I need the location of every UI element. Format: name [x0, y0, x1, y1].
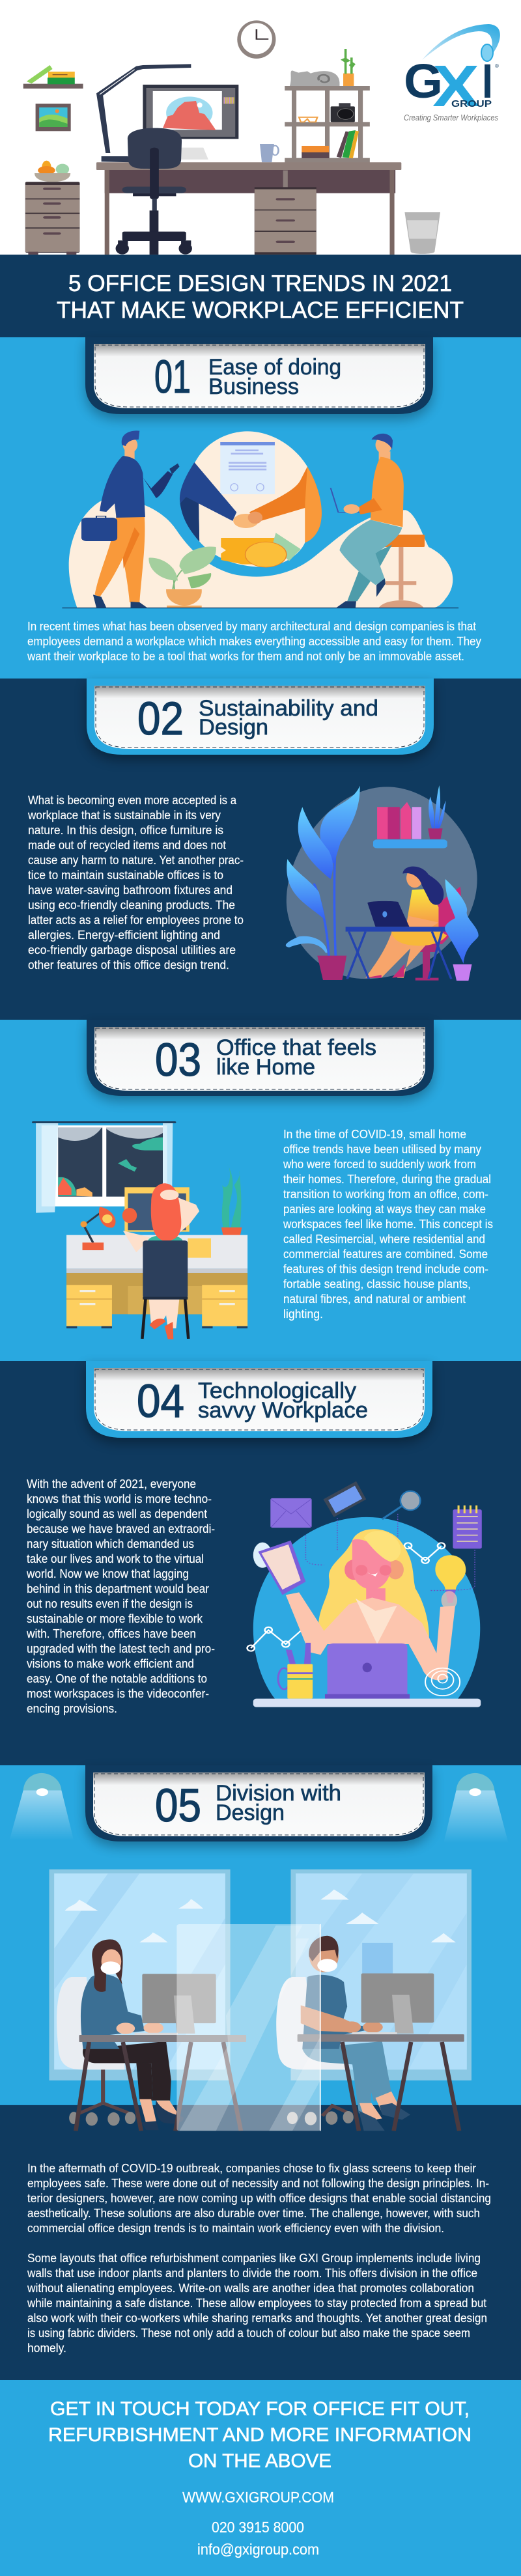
logo: Creating Smarter Workplaces: [404, 113, 498, 122]
body text 05 paragraph 2: walls that use indoor plants and planters to divide the room. This offers division in the office: [27, 2267, 477, 2280]
woman from behind: [122, 1183, 199, 1339]
filing cabinet with fruit bowl: [25, 161, 79, 255]
logo: G: [404, 54, 443, 108]
body text 03: fortable seating, classic house plants,: [283, 1278, 471, 1291]
body text 02: latter acts as a relief for employees prone to: [28, 914, 244, 927]
tab heading 02: 02: [137, 693, 184, 745]
body text 02: [27, 794, 244, 972]
desk: [96, 162, 401, 255]
panel: section 01: [27, 337, 481, 663]
woman with mask: [57, 1939, 184, 2130]
window with curtains: [32, 1121, 176, 1213]
body text 03: commercial features are combined. Some: [283, 1248, 488, 1261]
body text 02: nature. In this design, office furniture is: [28, 824, 223, 837]
body text 05 paragraph 2: while maintaining a safe distance. These allow employees to stay protected from a spread but: [27, 2297, 486, 2310]
computer monitor: [143, 85, 238, 160]
body text 05 paragraph 2: without alienating employees. Write-on walls are another idea that promotes collaboration: [27, 2282, 474, 2295]
body text 05 paragraph 2: Some layouts that office refurbishment companies like GXI Group implements include living: [27, 2252, 481, 2265]
left man: [81, 430, 180, 608]
logo: X: [432, 54, 479, 119]
desks and monitors: [76, 1973, 464, 2131]
body text 03: panies are looking at ways they can make: [283, 1203, 486, 1216]
body text 04: most workspaces is the videoconfer-: [27, 1687, 209, 1700]
body text 02: eco-friendly garbage disposal utilities are: [28, 944, 236, 957]
windows: [49, 1869, 472, 2080]
tab heading 03: 03: [155, 1035, 201, 1086]
title: THAT MAKE WORKPLACE EFFICIENT: [57, 298, 464, 323]
bookcase with cat, camera and plant: [285, 49, 370, 163]
body text 02: using eco-friendly cleaning products. The: [28, 899, 235, 912]
wall shelf with books: [23, 65, 83, 89]
coffee mug: [260, 144, 279, 162]
small plant: [445, 879, 479, 981]
body text 01: [27, 620, 481, 663]
body text 03: office trends have been utilised by many: [283, 1143, 481, 1156]
tab heading 04: [86, 1361, 432, 1443]
coins and cash: [221, 533, 301, 567]
illustration: home office: [32, 1121, 247, 1339]
body text 02: workplace that is sustainable in its very: [27, 809, 221, 822]
body text 04: easy. One of the notable additions to: [27, 1672, 207, 1685]
chart lines: [247, 1543, 445, 1651]
tab heading 03: [87, 1020, 434, 1101]
chair: [142, 1240, 188, 1339]
body text 03: who were forced to suddenly work from: [283, 1158, 476, 1171]
tab heading 01: Business: [208, 374, 299, 399]
envelope: [270, 1498, 312, 1528]
body text 03: [283, 1128, 493, 1321]
body text 01: employees demand a workplace which makes everything accessible and easy for them. They: [27, 635, 481, 648]
contact details: info@gxigroup.com: [197, 2541, 319, 2558]
call to action heading: GET IN TOUCH TODAY FOR OFFICE FIT OUT,: [50, 2398, 470, 2420]
body text 02: allergies. Energy-efficient lighting and: [28, 929, 220, 942]
illustration: woman at laptop with plants: [286, 785, 479, 981]
logo: ®: [495, 63, 499, 69]
call to action heading: ON THE ABOVE: [188, 2450, 331, 2472]
illustration: woman with devices: [247, 1481, 482, 1707]
woman: [286, 1529, 455, 1680]
body text 03: features of this design trend include com-: [283, 1263, 488, 1276]
tab heading 03: like Home: [216, 1055, 315, 1080]
target: [425, 1668, 460, 1696]
tab heading 02: Sustainability and: [199, 696, 378, 721]
tab heading 03: Office that feels: [216, 1035, 376, 1060]
tab heading 04: 04: [137, 1376, 184, 1427]
body text 04: sustainable or more flexible to work: [27, 1612, 203, 1625]
tab heading 01: Ease of doing: [208, 355, 341, 380]
hero office illustration: [23, 20, 440, 255]
body text 03: In the time of COVID-19, small home: [283, 1128, 466, 1141]
contact details: 020 3915 8000: [212, 2519, 304, 2536]
body text 04: knows that this world is more techno-: [27, 1492, 212, 1505]
large plant: [286, 786, 360, 980]
body text 03: lighting.: [283, 1308, 323, 1321]
tab heading 05: Division with: [216, 1781, 341, 1806]
body text 04: nary situation which demanded us: [27, 1537, 194, 1550]
laptop and table: [346, 901, 460, 979]
body text 03: transition to working from an office, com-: [283, 1188, 488, 1201]
body text 03: natural fibres, and natural or ambient: [283, 1293, 466, 1306]
body text 05 paragraph 1: [27, 2162, 491, 2235]
tablet: [253, 1541, 305, 1595]
body text 04: behind in this department would bear: [27, 1582, 209, 1595]
body text 05 paragraph 1: commercial office design trends is to maintain work efficiency even with the division.: [27, 2222, 444, 2235]
contact details: WWW.GXIGROUP.COM: [182, 2489, 334, 2506]
body text 03: called Resimercial, where residential and: [283, 1233, 485, 1246]
glass divider: [176, 1924, 321, 2131]
icon: wall clock: [237, 20, 275, 59]
body text 04: world. Now we know that lagging: [26, 1567, 189, 1580]
desk lamp: [96, 64, 191, 162]
document: [220, 442, 275, 494]
contact details: [182, 2489, 334, 2558]
magnifier: [382, 1491, 420, 1519]
body text 01: want their workplace to be a tool that works for them and not only be an immovable asset.: [27, 650, 464, 663]
tab heading 04: Technologically: [198, 1379, 356, 1403]
wall shelf: [373, 785, 447, 848]
tab heading 04: savvy Workplace: [198, 1398, 368, 1423]
body text 02: tice to maintain sustainable offices is to: [28, 869, 223, 882]
logo: GROUP: [451, 98, 492, 109]
tab heading 02: Design: [199, 715, 268, 740]
tab heading 01: [85, 337, 433, 419]
body text 02: cause any harm to nature. Yet another prac-: [28, 854, 244, 867]
panel: call to action: [48, 2398, 472, 2558]
body text 04: encing provisions.: [27, 1702, 117, 1715]
tab heading 01: 01: [154, 352, 191, 403]
body text 04: upgraded with the latest tech and pro-: [27, 1642, 215, 1655]
illustration: office with glass divider: [0, 1766, 521, 2162]
call to action heading: REFURBISHMENT AND MORE INFORMATION: [48, 2424, 472, 2446]
ceiling lamps: [9, 1766, 509, 1843]
woman: [365, 867, 447, 978]
body text 05 paragraph 2: is using fabric dividers. These not only add a touch of colour but also make the space seem: [27, 2327, 470, 2340]
body text 02: have water-saving bathroom fixtures and: [28, 884, 232, 897]
right man on stool: [331, 434, 425, 608]
body text 02: What is becoming even more accepted is a: [28, 794, 237, 807]
title: 5 OFFICE DESIGN TRENDS IN 2021: [68, 271, 452, 296]
chair: [410, 887, 461, 981]
body text 04: with. Therefore, offices have been: [26, 1627, 196, 1640]
panel: section 05: [0, 1765, 521, 2355]
monitor: [124, 1187, 190, 1232]
body text 02: other features of this office design trend.: [28, 959, 229, 972]
title: [57, 271, 464, 323]
waste bin: [404, 212, 440, 254]
body text 05 paragraph 1: employees safe. These were done out of necessity and not following the design principles. In-: [27, 2177, 489, 2190]
body text 04: logically sound as well as dependent: [27, 1507, 207, 1520]
panel: section 03: [32, 1020, 493, 1339]
body text 03: workspaces feel like home. This concept is: [283, 1218, 493, 1231]
tab heading 02: [87, 679, 434, 760]
body text 05 paragraph 1: aesthetically. These solutions are also durable over time. The challenge, however, with such: [27, 2207, 480, 2220]
mug with pencils: [278, 1643, 313, 1699]
illustration: handshake: [62, 430, 458, 608]
logo: [404, 24, 500, 122]
body text 05 paragraph 2: also work with their co-workers while sharing remarks and thoughts. Yet another great design: [27, 2312, 487, 2325]
panel: section 04: [26, 1361, 482, 1715]
desk: [66, 1235, 247, 1328]
panel: section 02: [27, 679, 479, 981]
body text 04: take our lives and work to the virtual: [27, 1552, 204, 1565]
body text 04: [26, 1477, 215, 1715]
man with mask: [276, 1936, 410, 2131]
body text 04: visions to make work efficient and: [27, 1657, 194, 1670]
desk lamp: [80, 1207, 115, 1250]
plant: [221, 1164, 242, 1248]
body text 03: their homes. Therefore, during the gradual: [283, 1173, 491, 1186]
tab heading 05: [85, 1765, 432, 1847]
body text 02: made out of recycled items and does not: [28, 839, 226, 852]
body text 04: With the advent of 2021, everyone: [27, 1477, 196, 1491]
body text 05 paragraph 1: In the aftermath of COVID-19 outbreak, companies chose to fix glass screens to keep their: [27, 2162, 476, 2175]
bulb: [435, 1555, 466, 1610]
plant: [148, 547, 216, 608]
desk drawers: [255, 187, 317, 255]
body text 05 paragraph 2: homely.: [27, 2342, 66, 2355]
laptop: [325, 1644, 410, 1699]
tab heading 05: 05: [155, 1780, 201, 1832]
body text 04: because we have braved an extraordi-: [27, 1522, 215, 1535]
body text 05 paragraph 1: terior designers, however, are now coming up with office designs that enable social distancing: [27, 2192, 491, 2205]
body text 05 paragraph 2: [27, 2252, 487, 2355]
tab heading 05: Design: [216, 1800, 285, 1825]
body text 01: In recent times what has been observed by many architectural and design companies is that: [27, 620, 476, 633]
logo: I: [482, 54, 493, 108]
picture frame: [36, 104, 71, 131]
notebook: [453, 1505, 482, 1548]
phone: [323, 1481, 366, 1517]
keyboard: [188, 1239, 211, 1258]
handshake arms: [180, 462, 322, 542]
office chair: [116, 128, 192, 255]
body text 04: out no results even if the design is: [27, 1597, 193, 1610]
call to action heading: [48, 2398, 472, 2472]
